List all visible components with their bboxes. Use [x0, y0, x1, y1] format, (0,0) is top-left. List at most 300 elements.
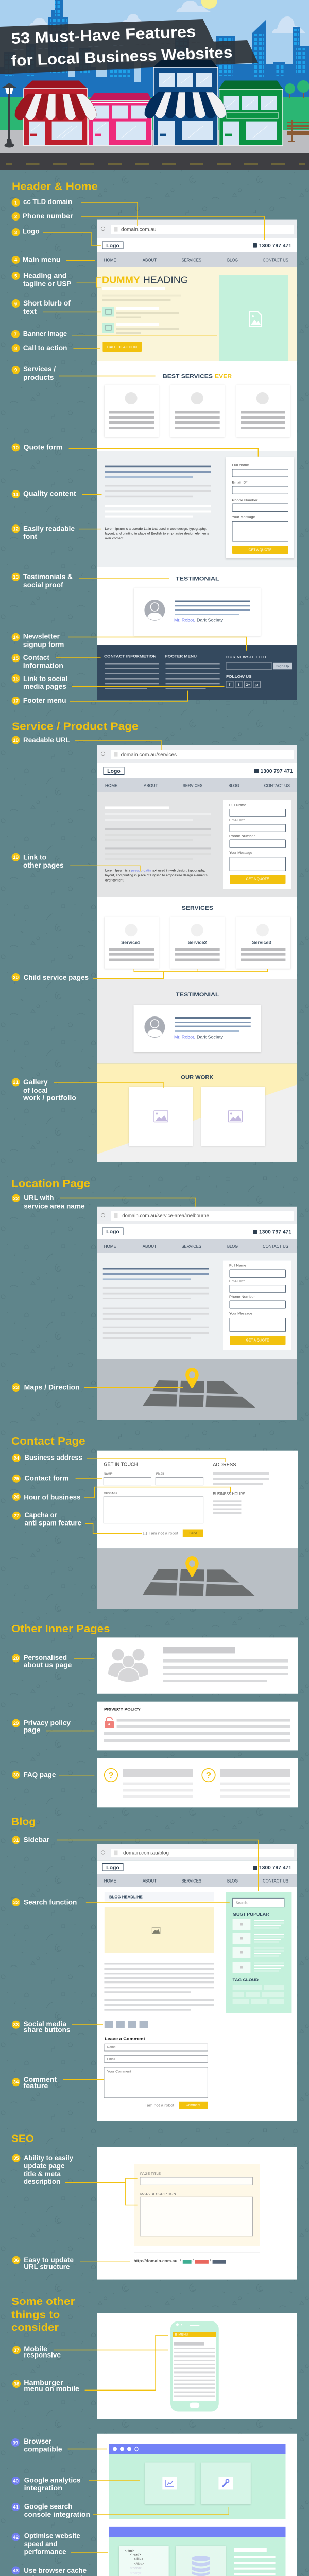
callout 4: main menu [12, 256, 95, 264]
gallery section: OUR WORK [181, 1074, 214, 1080]
browser compatible bar [109, 2444, 285, 2454]
callout 31: sidebar: 31 [13, 1838, 19, 1843]
panel: about us [97, 1637, 298, 1694]
service card 3: Service3 [252, 940, 271, 945]
callout 3: logo: Logo [23, 228, 40, 235]
callout 25: contact form [12, 1475, 102, 1483]
callout 21: gallery [12, 1078, 164, 1101]
footer: FOOTER MENU [165, 654, 197, 659]
contact form: MESSAGE [104, 1492, 117, 1495]
services section [97, 361, 297, 451]
callout 41: search console: console integration [24, 2511, 90, 2518]
clouds [29, 1, 305, 33]
section: Blog [11, 1816, 297, 2121]
callout 22: url with service area: service area name [24, 1202, 85, 1210]
callout 18: readable url: 18 [13, 738, 19, 743]
newsletter signup form: Sign Up [276, 665, 289, 668]
main menu: BLOG [227, 1878, 238, 1883]
quote form: Email ID* [229, 819, 245, 822]
panel: technical features [97, 2434, 297, 2576]
callout 18: readable url: Readable URL [23, 736, 70, 744]
callout 23: maps: 23 [13, 1385, 19, 1391]
address and hours: BUSINESS HOURS [213, 1492, 245, 1496]
comment form [104, 2036, 208, 2109]
callout 27: captcha: Capcha or [25, 1511, 57, 1519]
testimonial section [97, 979, 297, 1063]
heading [11, 2296, 75, 2333]
panel: contact page wireframe [97, 1451, 298, 1609]
site header with logo and phone [97, 238, 297, 252]
icon: phone mockup [170, 2321, 219, 2411]
shop: pink [89, 93, 152, 145]
callout 17: footer menu [12, 691, 187, 705]
callout 29: privacy policy: page [24, 1726, 41, 1734]
quote form: Full Name [229, 803, 247, 807]
callout 26: hours of business: 26 [14, 1494, 19, 1500]
browser bar [97, 745, 297, 763]
title: for Local Business Websites [11, 44, 233, 70]
main menu: SERVICES [181, 1878, 201, 1883]
code card: </title> [134, 2562, 144, 2566]
site header: Logo [106, 1229, 119, 1235]
icon: padlock [105, 1717, 114, 1728]
callout 35: page title and meta [12, 2154, 138, 2205]
quote form: Your Message [229, 1312, 253, 1316]
main menu [97, 1874, 297, 1887]
callout 6: short blurb: Short blurb of [23, 299, 71, 307]
panel: FAQ [97, 1758, 298, 1807]
callout 28: about us: about us page [24, 1661, 72, 1669]
panel: privacy policy: PRIVECY POLICY [104, 1707, 141, 1712]
social share buttons [105, 2021, 148, 2028]
callout 28: about us: 28 [13, 1656, 19, 1662]
heading: Service / Product Page [12, 721, 139, 733]
browser bar [97, 220, 297, 238]
quote form: Email ID* [229, 1280, 245, 1283]
callout 25: contact form: Contact form [25, 1475, 69, 1482]
callout 33: social share [12, 2020, 103, 2033]
map [97, 1548, 298, 1609]
gallery section [97, 1063, 297, 1162]
callout 29: privacy policy: Privacy policy [24, 1719, 71, 1727]
callout 8: call to action [12, 344, 100, 352]
call to action button [102, 342, 142, 352]
callout 14: newsletter: signup form [23, 640, 64, 648]
main menu: SERVICES [181, 1244, 201, 1249]
callout 27: captcha: anti spam feature [25, 1519, 81, 1527]
icon: question mark 1 [105, 1769, 117, 1782]
main menu [97, 778, 297, 792]
hero illustration: shopfront street [0, 0, 309, 170]
service card 1 [105, 917, 159, 969]
address and hours: ADDRESS [213, 1462, 236, 1468]
callout 13: testimonials: Testimonials & [23, 573, 73, 581]
callout 1: cc TLD domain [12, 198, 138, 226]
callout 10: quote form: 10 [13, 445, 19, 451]
callout 36: URL structure: 36 [13, 2258, 19, 2263]
callout 24: business address: Business address [25, 1454, 82, 1462]
icon: map pin [185, 1368, 199, 1388]
main menu: HOME [105, 783, 118, 788]
heading: Header & Home [12, 181, 98, 193]
callout 36: URL structure [12, 2256, 130, 2271]
callout 20: child service pages: Child service pages [24, 974, 89, 981]
icon: question mark 2: ? [206, 1770, 211, 1781]
icon: sun [201, 0, 217, 9]
panel: service page wireframe [97, 745, 297, 1162]
callout 42: optimise speed: speed and [24, 2540, 57, 2548]
most popular list [233, 1912, 284, 1973]
icon: question mark 2 [202, 1769, 215, 1782]
analytics and console block [109, 2454, 285, 2519]
callout 41: search console: Google search [24, 2502, 73, 2510]
site header: 1300 797 471 [259, 1865, 291, 1871]
callout 2: phone number: Phone number [23, 212, 73, 220]
social media links [226, 674, 261, 688]
title banners [0, 19, 258, 74]
panel: home page wireframe [97, 220, 297, 700]
callout 9: services: Services / [23, 365, 56, 373]
callout 33: social share: Social media [24, 2020, 66, 2028]
callout 29: privacy policy: 29 [13, 1721, 19, 1726]
callout 40: google analytics: Google analytics [24, 2476, 81, 2484]
callout 3: logo [12, 228, 101, 245]
most popular list: MOST POPULAR [233, 1912, 269, 1917]
callout 43: browser cache [12, 2566, 175, 2576]
callout 35: page title and meta: 35 [13, 2156, 19, 2161]
comment form: Name [107, 2046, 116, 2049]
callout 9: services: 9 [14, 367, 17, 373]
readable paragraph: Lorem Ipsum is a pseudo-Latin text used in web design, typography, [105, 527, 207, 531]
callout 39: browser compatible: Browser [24, 2437, 52, 2445]
quote form [226, 457, 294, 558]
readable paragraph: layout, and printing in place of English to emphasise design elements [105, 532, 209, 536]
paragraph with link: over content. [105, 878, 124, 882]
code card [119, 2546, 169, 2576]
lawn, sidewalk and road [0, 97, 309, 170]
callout 2: phone number [12, 212, 265, 240]
footer [97, 645, 297, 700]
testimonial section: Mr, Robot, [174, 1035, 195, 1039]
callout 38: hamburger menu [12, 2335, 168, 2393]
callout 7: banner image: 7 [14, 332, 17, 337]
callout 43: browser cache: 43 [13, 2568, 19, 2574]
main menu: HOME [104, 1878, 116, 1883]
readable paragraph: over content. [105, 537, 124, 540]
quote form: Email ID* [232, 481, 248, 484]
section: Header & Home [11, 181, 297, 705]
callout 39: browser compatible [11, 2437, 107, 2453]
callout 38: hamburger menu: Hamburger [24, 2379, 63, 2386]
callout 39: browser compatible: compatible [24, 2446, 62, 2453]
child services section: SERVICES [182, 905, 213, 911]
callout 25: contact form: 25 [14, 1476, 20, 1482]
callout 32: search [12, 1898, 230, 1906]
callout 16: social links: Link to social [23, 675, 67, 683]
gallery card 1 [129, 1087, 193, 1146]
shop: red [23, 80, 88, 145]
sky [0, 0, 309, 98]
callout 40: google analytics: integration [24, 2484, 62, 2492]
speed block header [109, 2527, 285, 2537]
callout 19: link to other pages: Link to [23, 853, 46, 861]
callout 23: maps: Maps / Direction [24, 1384, 80, 1392]
callout 5: heading and tagline [12, 272, 101, 287]
callout 42: optimise speed: 42 [13, 2535, 19, 2540]
services section: EVER [215, 373, 232, 379]
URL structure: / [193, 2259, 194, 2263]
skyline buildings [0, 0, 309, 98]
callout 24: business address: 24 [14, 1455, 20, 1461]
map [97, 1359, 297, 1420]
social media links: f [229, 682, 231, 687]
testimonial section: Mr, Robot, [174, 618, 195, 623]
footer: CONTACT INFORMETION [104, 654, 157, 659]
callout 9: services [12, 365, 156, 381]
newsletter signup form [226, 663, 292, 669]
quote form: Your Message [232, 516, 255, 519]
banner image [219, 275, 288, 361]
social media links: FOLLOW US [226, 674, 252, 679]
browser bar: domain.com.au/blog [123, 1851, 169, 1856]
callout 43: browser cache: Use browser cache [24, 2567, 87, 2574]
callout 14: newsletter [12, 633, 246, 651]
URL structure: http://domain.com.au [134, 2259, 178, 2263]
main menu [97, 252, 297, 267]
callout 2: phone number: 2 [14, 214, 17, 219]
callout 19: link to other pages [12, 853, 140, 871]
callout 12: easily readable font: font [23, 533, 38, 540]
callout 22: url with service area [12, 1194, 196, 1210]
callout 22: url with service area: 22 [13, 1196, 19, 1201]
main menu: ABOUT [143, 1244, 157, 1249]
panel: privacy policy [97, 1702, 298, 1750]
callout 6: short blurb [12, 299, 101, 315]
callout 42: optimise speed: Optimise website [24, 2532, 80, 2540]
callout 16: social links [12, 674, 224, 690]
main menu: BLOG [227, 1244, 238, 1249]
heading: Other Inner Pages [11, 1623, 110, 1635]
callout 15: contact information: 15 [13, 656, 19, 662]
callout 13: testimonials: social proof [23, 581, 63, 589]
callout 10: quote form [12, 443, 258, 457]
search console card [201, 2463, 251, 2504]
main menu [97, 1239, 297, 1253]
main menu: SERVICES [181, 257, 201, 262]
panel: mobile [97, 2313, 297, 2419]
callout 13: testimonials: 13 [13, 574, 19, 580]
main menu: CONTACT US [263, 1244, 288, 1249]
section: Location Page [11, 1178, 297, 1420]
quote form: Your Message [229, 851, 253, 855]
callout 19: link to other pages: 19 [13, 855, 19, 860]
contact form: EMAIL: [156, 1472, 166, 1476]
service card 1: Service1 [121, 940, 140, 945]
main menu: CONTACT US [263, 257, 288, 262]
callout 4: main menu: 4 [14, 257, 18, 263]
callout 38: hamburger menu: menu on mobile [24, 2385, 79, 2393]
section: Some other things to consider [11, 2296, 297, 2576]
callout 39: browser compatible: 39 [13, 2440, 18, 2446]
callout 11: quality content: 11 [13, 492, 19, 497]
service card 1 [105, 385, 159, 437]
icon: question mark 1: ? [108, 1770, 114, 1781]
content with form [97, 1253, 297, 1359]
browser bar: domain.com.au/services [121, 752, 177, 758]
cached card [176, 2546, 226, 2576]
site header: Logo [107, 768, 121, 774]
service card 2 [170, 917, 225, 969]
quote form: Phone Number [229, 1295, 255, 1299]
contact form: NAME: [104, 1472, 113, 1476]
callout 30: FAQ: FAQ page [24, 1771, 56, 1778]
heading: Location Page [11, 1178, 90, 1190]
callout 35: page title and meta: Ability to easily [24, 2154, 73, 2162]
callout 3: logo: 3 [14, 230, 17, 235]
callout 26: hours of business [12, 1487, 230, 1501]
address and hours [213, 1462, 269, 1514]
quote form [223, 1261, 291, 1350]
comment form: Email [107, 2058, 115, 2061]
heading: Some other [11, 2296, 75, 2308]
service card 3 [236, 385, 290, 437]
callout 27: captcha [12, 1511, 142, 1534]
callout 18: readable url [12, 736, 161, 750]
gallery card 2 [201, 1087, 265, 1146]
awning: navy [145, 92, 226, 118]
blog body: BLOG HEADLINE [109, 1894, 143, 1899]
meta fields [134, 2164, 260, 2246]
callout 11: quality content [12, 490, 101, 498]
paragraph with link: pseudo-Latin [131, 869, 151, 872]
callout 29: privacy policy [12, 1719, 94, 1734]
testimonial section: Dark Society [197, 618, 223, 623]
meta fields: MATA DESCRIPTION [140, 2192, 176, 2196]
content and quote form section [97, 451, 297, 567]
callout 28: about us: Personalised [24, 1654, 67, 1662]
callout 16: social links: 16 [13, 676, 19, 682]
quote form: Full Name [229, 1264, 247, 1268]
callout 32: search: 32 [13, 1900, 19, 1905]
quote form: Phone Number [232, 499, 258, 502]
callout 31: sidebar: Sidebar [24, 1836, 50, 1843]
social media links: t [238, 682, 240, 687]
shop: blue [153, 60, 218, 145]
featured image [105, 1907, 214, 1953]
callout 40: google analytics: 40 [13, 2478, 19, 2484]
code card: <html> [125, 2549, 134, 2553]
bench [287, 120, 309, 142]
social media links: p [255, 682, 258, 687]
callout 21: gallery: Gallery [23, 1078, 48, 1086]
callout 35: page title and meta: title & meta [24, 2170, 61, 2178]
callout 37: mobile responsive: responsive [24, 2351, 61, 2359]
callout 6: short blurb: text [23, 308, 37, 315]
callout 38: hamburger menu: 38 [14, 2381, 19, 2387]
callout 5: heading and tagline: 5 [14, 273, 18, 279]
banner area: HEADING [143, 275, 188, 285]
quote form: Full Name [232, 464, 249, 467]
panel: SEO fields [97, 2147, 297, 2280]
callout 26: hours of business: Hour of business [24, 1493, 80, 1501]
callout 10: quote form: Quote form [24, 443, 62, 451]
service card 3 [236, 917, 290, 969]
shop: green [219, 80, 283, 145]
awning: red [15, 94, 96, 120]
quote form: GET A QUOTE [246, 877, 269, 882]
social media links: G+ [246, 683, 250, 687]
site header with logo and phone: Logo [106, 243, 119, 249]
captcha and send: I am not a robot [149, 1531, 179, 1535]
heading: SEO [11, 2133, 34, 2145]
URL structure: / [210, 2259, 211, 2263]
callout 32: search: Search function [24, 1899, 77, 1906]
heading: Blog [11, 1816, 36, 1827]
main menu: BLOG [229, 783, 239, 788]
callout 37: mobile responsive: Mobile [24, 2345, 48, 2353]
paragraph with link: text used in web design, typography, [152, 869, 205, 872]
section: Other Inner Pages [11, 1623, 298, 1807]
callout 37: mobile responsive [12, 2345, 168, 2359]
callout 17: footer menu: 17 [13, 698, 19, 704]
captcha and send: Send [189, 1532, 197, 1535]
testimonial section: Dark Society [197, 1035, 223, 1039]
callout 15: contact information: Contact [23, 654, 50, 662]
search box [233, 1898, 284, 1907]
browser bar [97, 1844, 297, 1861]
testimonial section: TESTIMONIAL [176, 992, 219, 998]
callout 5: heading and tagline: Heading and [23, 272, 66, 279]
service card 2: Service2 [187, 940, 207, 945]
callout 16: social links: media pages [23, 683, 66, 690]
paragraph with link: Lorem Ipsum is a [105, 869, 131, 872]
callout 35: page title and meta: update page [24, 2162, 65, 2170]
callout 36: URL structure: URL structure [24, 2263, 70, 2271]
main menu: SERVICES [183, 783, 203, 788]
main menu: HOME [104, 257, 116, 262]
comment form: I am not a robot [144, 2103, 175, 2108]
speed and cache block [109, 2537, 285, 2576]
banner area: DUMMY [102, 275, 140, 285]
callout 21: gallery: of local [23, 1087, 48, 1094]
title: 53 Must-Have Features [11, 23, 196, 47]
site header: 1300 797 471 [261, 768, 293, 774]
testimonial section: TESTIMONIAL [176, 576, 219, 582]
testimonial section [97, 567, 297, 645]
content with form [97, 792, 297, 897]
callout 14: newsletter: 14 [13, 635, 19, 640]
callout 5: heading and tagline: tagline or USP [23, 280, 71, 287]
callout 6: short blurb: 6 [14, 301, 17, 307]
callout 42: optimise speed [12, 2532, 108, 2556]
service card 2 [170, 385, 225, 437]
callout 15: contact information: information [23, 662, 63, 670]
callout 40: google analytics [12, 2476, 140, 2492]
callout 21: gallery: work / portfolio [23, 1094, 76, 1101]
main menu: ABOUT [143, 1878, 157, 1883]
callout 19: link to other pages: other pages [23, 861, 64, 869]
callout 36: URL structure: Easy to update [24, 2256, 74, 2264]
heading: things to [11, 2309, 60, 2320]
callout 8: call to action: 8 [14, 346, 17, 351]
main menu: ABOUT [144, 783, 158, 788]
analytics card [145, 2463, 195, 2504]
callout 4: main menu: Main menu [23, 256, 61, 264]
browser bar: domain.com.au/service-area/melbourne [122, 1213, 209, 1219]
callout 20: child service pages: 20 [13, 975, 19, 980]
tag cloud: TAG CLOUD [233, 1978, 259, 1982]
callout 15: contact information [12, 654, 101, 670]
